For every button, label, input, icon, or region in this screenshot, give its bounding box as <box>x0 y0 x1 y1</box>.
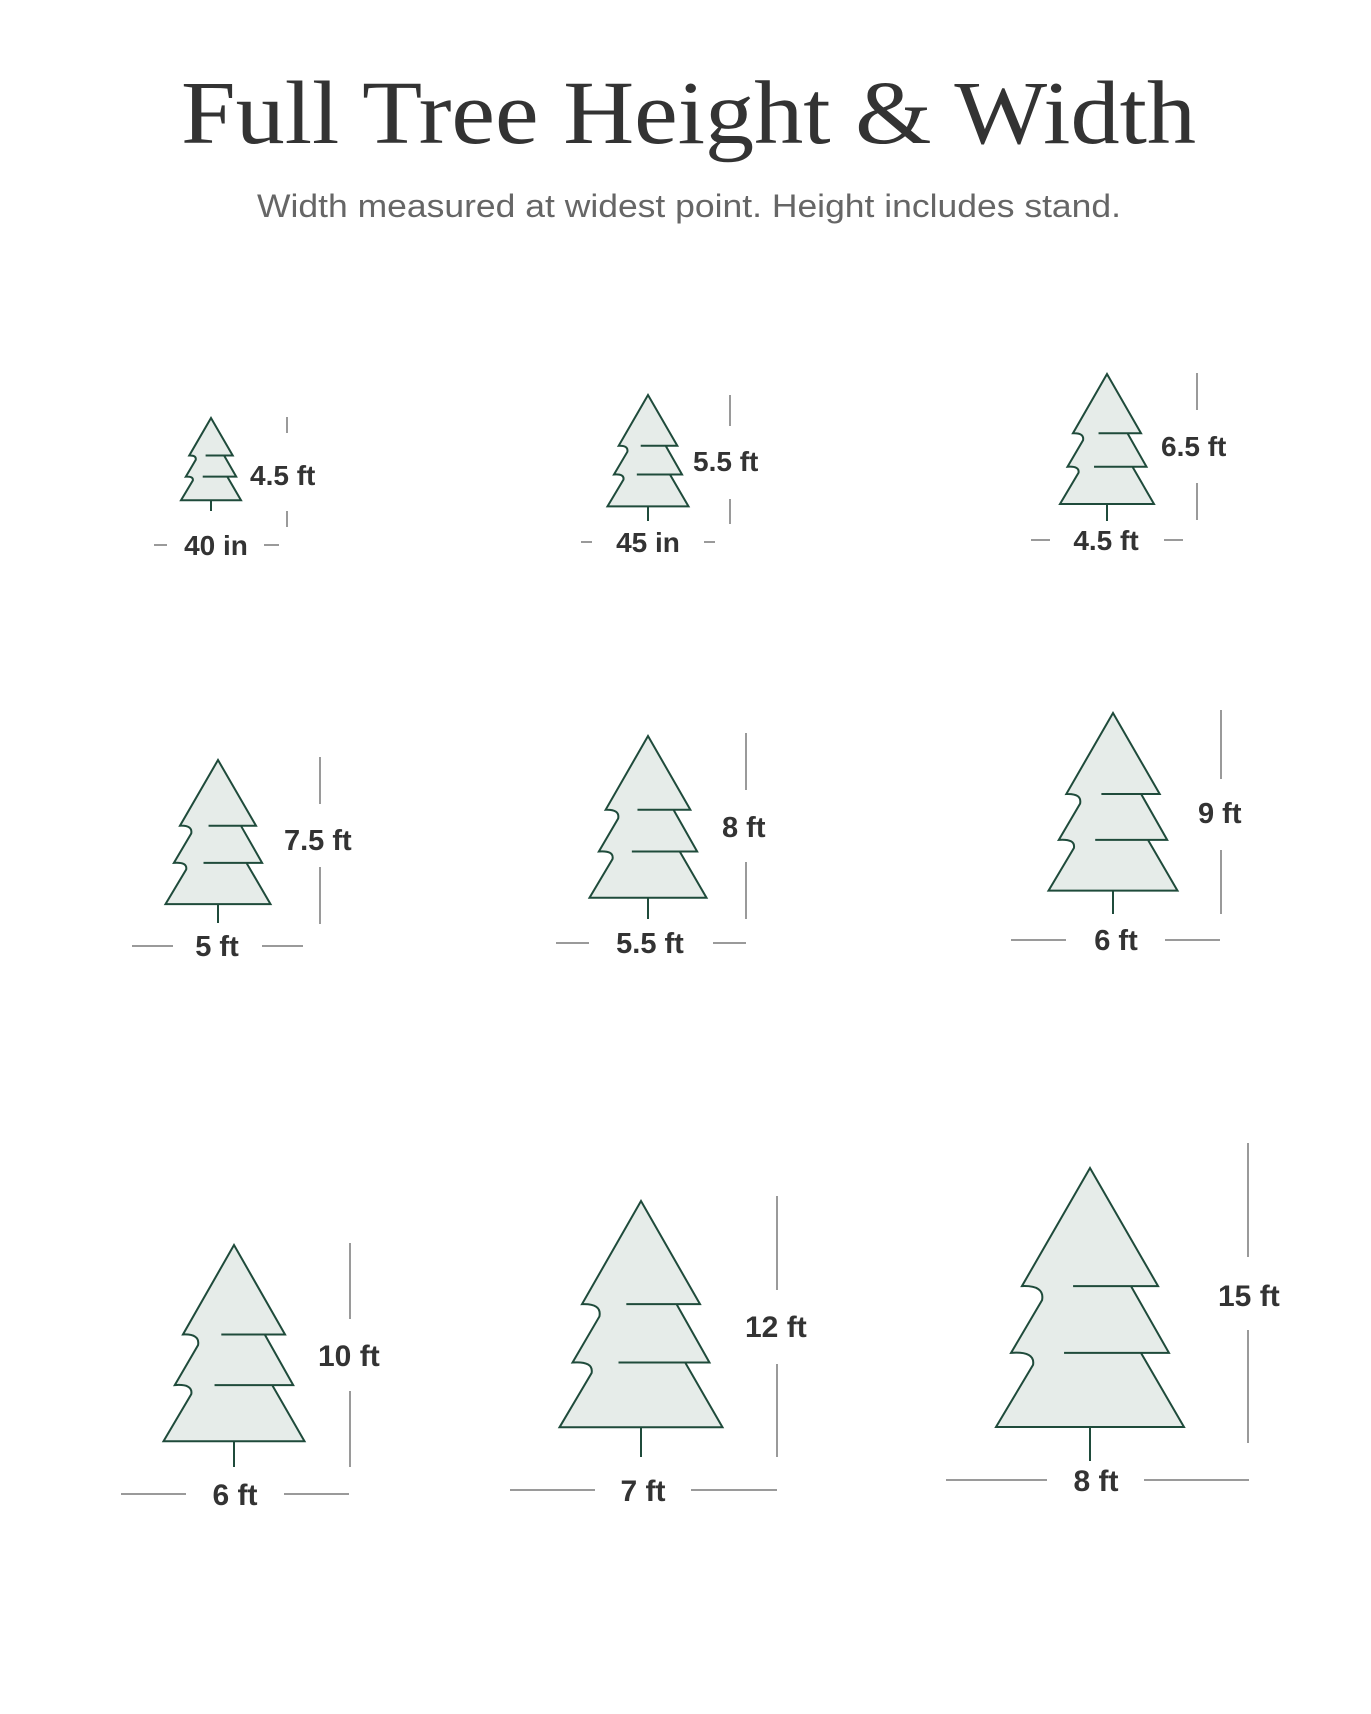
title: Full Tree Height & Width <box>181 64 1196 163</box>
tree 8: 12 ft / 7 ft <box>510 1196 807 1508</box>
tree 3: 6.5 ft / 4.5 ft: 6.5 ft <box>1161 431 1226 462</box>
tree 2: 5.5 ft / 45 in: 45 in <box>616 527 680 558</box>
tree 7: 10 ft / 6 ft <box>121 1243 380 1512</box>
tree 3: 6.5 ft / 4.5 ft: 4.5 ft <box>1073 525 1139 556</box>
tree 4: 7.5 ft / 5 ft <box>132 757 352 963</box>
tree 9: 15 ft / 8 ft: 15 ft <box>1218 1280 1280 1313</box>
tree 7: 10 ft / 6 ft: 6 ft <box>212 1479 258 1512</box>
tree 6: 9 ft / 6 ft <box>1011 710 1242 957</box>
tree 8: 12 ft / 7 ft: 7 ft <box>620 1475 666 1508</box>
tree 2: 5.5 ft / 45 in <box>581 395 758 558</box>
tree 6: 9 ft / 6 ft: 6 ft <box>1094 925 1138 957</box>
tree 2: 5.5 ft / 45 in: 5.5 ft <box>693 446 758 477</box>
subtitle: Width measured at widest point. Height includes stand. <box>257 188 1121 224</box>
tree 5: 8 ft / 5.5 ft <box>556 733 766 960</box>
tree 6: 9 ft / 6 ft: 9 ft <box>1198 798 1242 830</box>
tree 4: 7.5 ft / 5 ft: 7.5 ft <box>284 825 352 857</box>
tree 1: 4.5 ft / 40 in <box>154 417 315 561</box>
tree 7: 10 ft / 6 ft: 10 ft <box>318 1340 380 1373</box>
tree 5: 8 ft / 5.5 ft: 8 ft <box>722 812 766 844</box>
tree 9: 15 ft / 8 ft <box>946 1143 1280 1498</box>
tree 5: 8 ft / 5.5 ft: 5.5 ft <box>616 928 684 960</box>
tree 4: 7.5 ft / 5 ft: 5 ft <box>195 931 239 963</box>
tree 1: 4.5 ft / 40 in: 40 in <box>184 530 248 561</box>
tree 8: 12 ft / 7 ft: 12 ft <box>745 1311 807 1344</box>
tree 9: 15 ft / 8 ft: 8 ft <box>1074 1465 1119 1498</box>
tree 1: 4.5 ft / 40 in: 4.5 ft <box>250 460 315 491</box>
tree 3: 6.5 ft / 4.5 ft <box>1031 373 1226 556</box>
